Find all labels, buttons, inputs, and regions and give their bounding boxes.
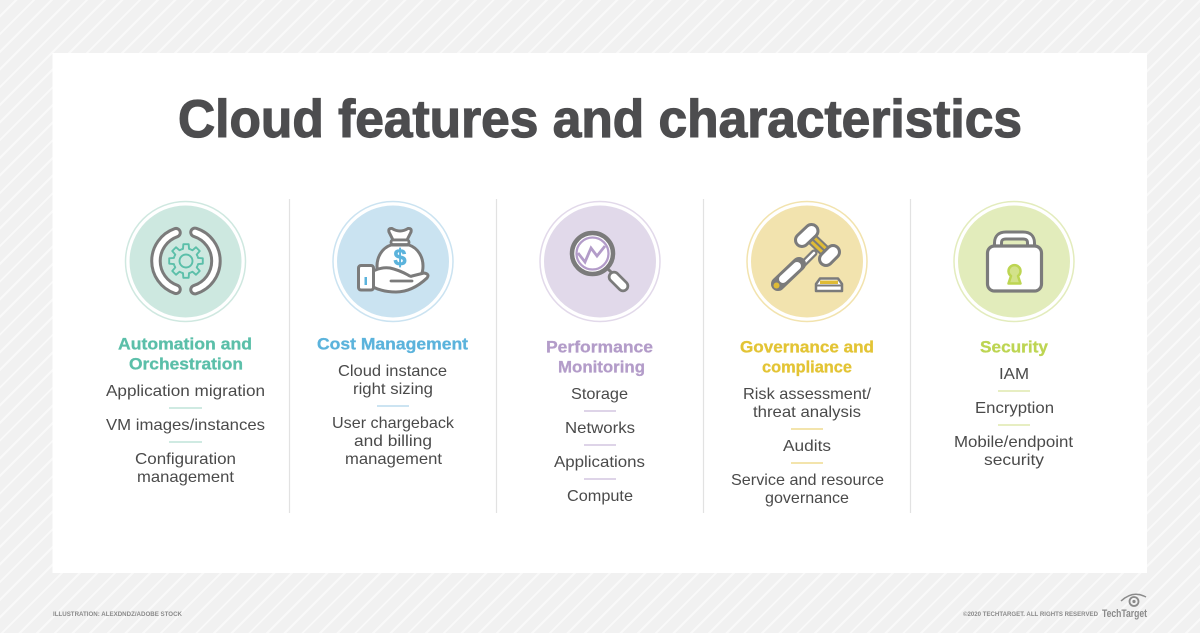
panel: performance monitoring	[540, 202, 660, 505]
icon: gavel	[747, 202, 867, 322]
panel: security	[954, 202, 1074, 469]
list: automation items: management	[137, 469, 235, 486]
white card panel	[52, 53, 1147, 573]
list: governance items: governance	[765, 490, 849, 507]
panel: cost management	[317, 202, 469, 468]
heading: cost management: Cost Management	[317, 336, 469, 354]
list: governance items: threat analysis	[753, 404, 861, 421]
list: automation items	[106, 383, 265, 486]
list: security items: Mobile/endpoint	[954, 434, 1074, 451]
list: security items: Encryption	[975, 400, 1054, 417]
heading: governance and compliance: compliance	[762, 358, 852, 376]
heading: performance monitoring: Performance	[546, 338, 653, 356]
list: cost items: User chargeback	[332, 415, 455, 432]
list: cost items: management	[345, 451, 443, 468]
illustration credit: ILLUSTRATION: ALEXDNDZ/ADOBE STOCK	[53, 611, 182, 618]
heading: performance monitoring: Monitoring	[558, 358, 645, 376]
copyright notice: ©2020 TECHTARGET. ALL RIGHTS RESERVED	[963, 610, 1098, 618]
list: security items	[954, 366, 1074, 469]
list: governance items: Risk assessment/	[743, 386, 872, 403]
list: performance items: Storage	[571, 386, 628, 403]
panel: governance and compliance	[731, 202, 884, 507]
list: performance items: Compute	[567, 488, 633, 505]
list: performance items: Networks	[565, 420, 635, 437]
list: cost items	[332, 363, 455, 468]
list: automation items: Application migration	[106, 383, 265, 400]
heading: automation and orchestration	[118, 336, 252, 374]
logo: TechTarget: TechTarget	[1102, 608, 1147, 620]
icon: money bag on hand	[333, 202, 453, 322]
list: performance items: Applications	[554, 454, 645, 471]
icon: gear with cycle arrows	[126, 202, 246, 322]
logo: TechTarget	[1102, 594, 1147, 620]
panel: automation and orchestration	[106, 202, 265, 486]
list: cost items: Cloud instance	[338, 363, 447, 380]
list: security items: IAM	[999, 366, 1029, 383]
list: automation items: VM images/instances	[106, 417, 265, 434]
list: governance items: Service and resource	[731, 472, 884, 489]
list: security items: security	[984, 452, 1044, 469]
icon: money bag on hand: $	[394, 244, 407, 270]
icon: magnifying glass with chart	[540, 202, 660, 322]
heading: automation and orchestration: Orchestration	[129, 356, 243, 374]
icon: padlock	[954, 202, 1074, 322]
list: performance items	[554, 386, 645, 505]
list: cost items: and billing	[354, 433, 432, 450]
list: cost items: right sizing	[353, 381, 433, 398]
list: automation items: Configuration	[135, 451, 236, 468]
list: governance items	[731, 386, 884, 507]
heading: governance and compliance: Governance and	[740, 338, 874, 356]
heading: performance monitoring	[546, 338, 653, 376]
list: governance items: Audits	[783, 438, 831, 455]
heading: security: Security	[980, 338, 1049, 356]
heading: automation and orchestration: Automation and	[118, 336, 252, 354]
title: Cloud features and characteristics	[178, 90, 1022, 149]
heading: governance and compliance	[740, 338, 874, 376]
